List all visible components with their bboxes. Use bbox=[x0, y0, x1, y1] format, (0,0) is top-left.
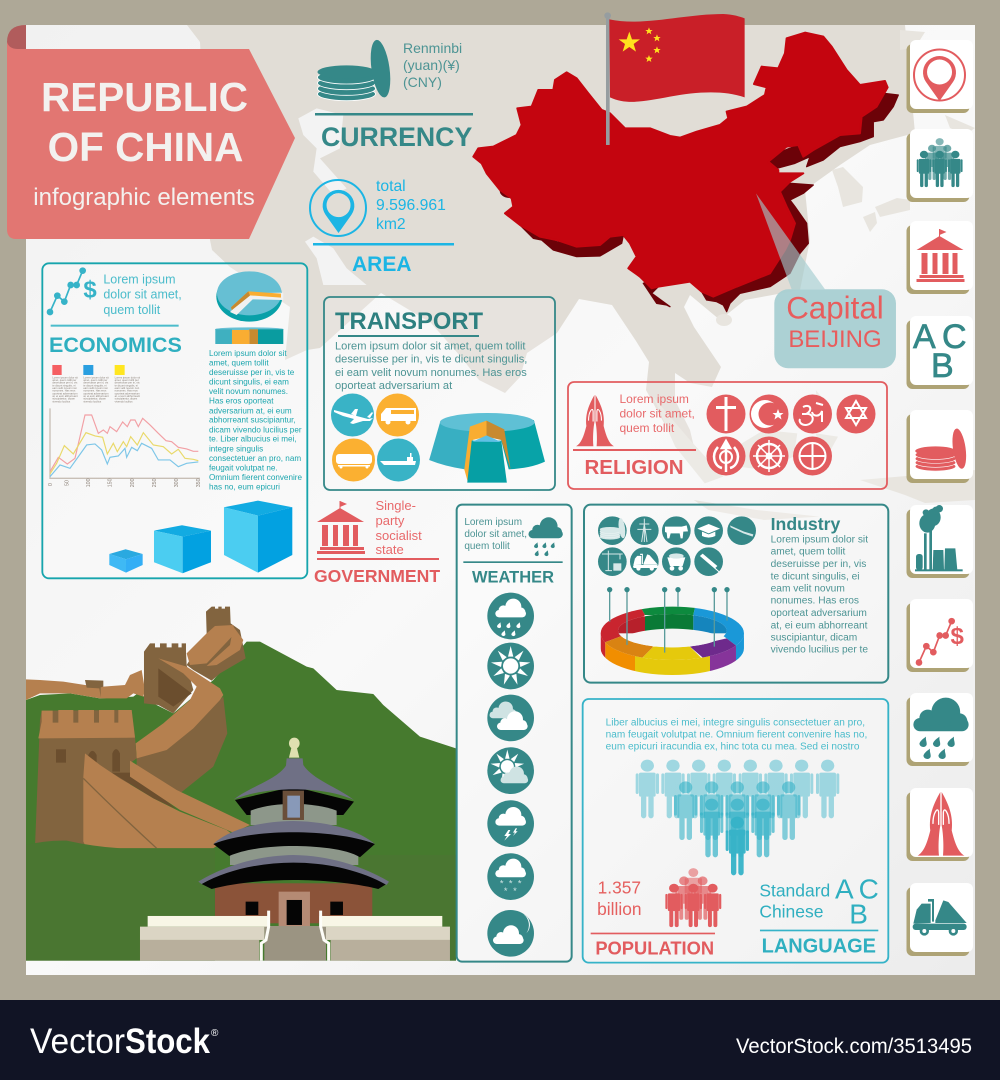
population text bbox=[606, 717, 867, 752]
industry text: nonumes. Has eros bbox=[771, 596, 859, 607]
pie chart icon bbox=[215, 271, 284, 344]
economics intro text: dolor sit amet, bbox=[103, 288, 182, 302]
watermark logo: ® bbox=[211, 1028, 219, 1039]
far wall bbox=[26, 670, 145, 700]
legend: deseruisse per in, vis bbox=[115, 381, 140, 385]
industry icons bbox=[598, 516, 756, 576]
legend: te dicunt singulis, ei bbox=[115, 383, 138, 387]
icon: sun and cloud bbox=[487, 747, 534, 794]
religion text: quem tollit bbox=[620, 421, 675, 435]
legend: eam velit novum non bbox=[115, 386, 140, 390]
icon: storm bbox=[487, 800, 534, 847]
icon: area pin bbox=[310, 180, 366, 236]
legend: oporteat adversarium bbox=[52, 391, 78, 395]
transport text bbox=[335, 340, 527, 392]
weather text bbox=[464, 517, 527, 552]
religion symbols bbox=[706, 394, 876, 476]
legend: Lorem ipsum dolor sit bbox=[52, 375, 78, 379]
industry text: te dicunt singulis, ei bbox=[771, 571, 860, 582]
industry text: eam velit novum bbox=[771, 584, 845, 595]
economics body text: integre singulis bbox=[209, 444, 263, 453]
area text bbox=[376, 178, 446, 233]
map land bbox=[473, 33, 888, 297]
language text bbox=[759, 880, 830, 921]
line chart: 50 bbox=[65, 480, 71, 486]
transport heading: TRANSPORT bbox=[335, 308, 484, 335]
line chart: 300 bbox=[174, 478, 180, 487]
card: factory bbox=[906, 505, 973, 578]
economics body text: dicunt singulis, ei eam bbox=[209, 378, 289, 387]
legend: nonumes. Has eros bbox=[52, 389, 76, 393]
area text: total bbox=[376, 178, 406, 195]
transport text: deseruisse per in, vis te dicunt singulis, bbox=[335, 354, 527, 366]
panel: government bbox=[314, 498, 440, 586]
panel: economics bbox=[42, 263, 307, 578]
religion text bbox=[620, 392, 695, 435]
ABC letters: B bbox=[849, 898, 868, 929]
legend: eam velit novum non bbox=[52, 386, 77, 390]
icon: praying hands bbox=[576, 395, 614, 446]
legend: at, ei eum abhorreant bbox=[115, 394, 140, 398]
icon: snow: * bbox=[509, 879, 513, 889]
weather text: Lorem ipsum bbox=[464, 517, 522, 528]
card: building bbox=[906, 221, 973, 294]
icon: plane bbox=[331, 394, 374, 436]
line chart: 0 bbox=[48, 483, 54, 486]
legend: eam velit novum non bbox=[83, 386, 108, 390]
industry text: amet, quem tollit bbox=[771, 547, 846, 558]
currency text bbox=[403, 40, 462, 90]
icon: rain bbox=[487, 593, 534, 639]
watermark url: VectorStock.com/3513495 bbox=[736, 1035, 972, 1058]
background world map bbox=[187, 25, 975, 520]
footer bar bbox=[0, 1000, 1000, 1080]
government text: party bbox=[376, 513, 405, 528]
icon: ship bbox=[377, 438, 420, 482]
currency text: (CNY) bbox=[403, 74, 442, 90]
line chart: 250 bbox=[152, 478, 158, 487]
economics body text: deseruisse per in, vis te bbox=[209, 368, 295, 377]
industry text: suscipiantur, dicam bbox=[771, 632, 857, 643]
legend: deseruisse per in, vis bbox=[52, 381, 78, 385]
icon: coins bbox=[318, 39, 393, 101]
map shadow bbox=[500, 47, 898, 312]
icon: government building bbox=[317, 501, 365, 554]
industry text: Lorem ipsum dolor sit bbox=[771, 534, 868, 545]
flag pole bbox=[604, 12, 611, 145]
icon: growth chart bbox=[47, 267, 97, 315]
panel: weather bbox=[457, 505, 572, 962]
card: language letters bbox=[906, 316, 973, 389]
legend: te dicunt singulis, ei bbox=[52, 383, 76, 387]
economics body text: has no, eum epicuri bbox=[209, 482, 280, 491]
capital text bbox=[786, 290, 884, 353]
religion text: dolor sit amet, bbox=[620, 406, 695, 420]
legend: vivendo lucilius bbox=[83, 399, 102, 403]
panel: industry bbox=[584, 505, 888, 683]
economics intro text bbox=[103, 272, 182, 317]
population text: eum epicuri iracundia ex, hinc tota cu mea. Sed ei nostro bbox=[606, 741, 860, 752]
map of China bbox=[473, 33, 898, 312]
icon: snow: * bbox=[513, 886, 517, 896]
population figure: 1.357 bbox=[598, 878, 641, 898]
icon: moon and cloud bbox=[487, 910, 534, 957]
icon: snow: * bbox=[504, 886, 508, 896]
economics body text: Omnium fierent convenire bbox=[209, 473, 302, 482]
economics body text: Has eros oporteat bbox=[209, 397, 274, 406]
legend bbox=[52, 365, 141, 403]
legend: oporteat adversarium bbox=[115, 391, 141, 395]
card: trend bbox=[906, 599, 973, 672]
economics heading: ECONOMICS bbox=[49, 332, 182, 357]
flag of China bbox=[604, 12, 745, 145]
legend: deseruisse per in, vis bbox=[83, 381, 109, 385]
card: hands bbox=[906, 788, 973, 861]
currency heading: CURRENCY bbox=[321, 122, 472, 152]
area heading: AREA bbox=[352, 253, 412, 276]
industry text: oporteat adversarium bbox=[771, 608, 867, 619]
panel: transport bbox=[324, 297, 555, 490]
flag cloth bbox=[609, 14, 745, 102]
economics body text: dicam vivendo lucilius per bbox=[209, 425, 302, 434]
ABC letters: C bbox=[859, 873, 879, 904]
card: language letters: C bbox=[942, 318, 967, 356]
economics body text: consectetuer an pro, nam bbox=[209, 454, 301, 463]
icon: growth chart: $ bbox=[83, 277, 97, 304]
economics body text: Lorem ipsum dolor sit bbox=[209, 349, 287, 358]
line chart: 150 bbox=[108, 478, 114, 487]
sidebar icon cards bbox=[906, 40, 973, 956]
legend: amet, quem tollit per bbox=[83, 378, 108, 382]
economics body text: velit novum nonumes. bbox=[209, 387, 288, 396]
ring chart bbox=[600, 606, 744, 675]
panel: currency bbox=[315, 39, 473, 152]
legend: oporteat adversarium bbox=[83, 391, 109, 395]
title text bbox=[33, 74, 255, 211]
population heading: POPULATION bbox=[595, 937, 714, 958]
transport text: ei eam velit novum nonumes. Has eros bbox=[335, 367, 527, 379]
legend: Lorem ipsum dolor sit bbox=[83, 375, 109, 379]
legend: suscipiantur, dicam bbox=[115, 397, 138, 401]
card: language letters: B bbox=[931, 347, 954, 385]
line chart bbox=[48, 408, 202, 487]
3D pie icon bbox=[429, 413, 545, 483]
industry heading: Industry bbox=[771, 514, 840, 534]
card: location bbox=[906, 40, 973, 113]
industry text: vivendo lucilius per te bbox=[771, 645, 868, 656]
title text: OF CHINA bbox=[48, 124, 243, 170]
weather heading: WEATHER bbox=[472, 568, 554, 586]
card: people bbox=[906, 129, 973, 202]
industry text bbox=[771, 534, 868, 656]
icon: cloudy bbox=[487, 695, 534, 741]
card: trend: $ bbox=[950, 623, 964, 650]
panel: population and language bbox=[583, 699, 888, 963]
currency text: Renminbi bbox=[403, 40, 462, 56]
foreground grass bbox=[26, 841, 215, 961]
front tower bbox=[35, 710, 137, 847]
chart pins bbox=[607, 587, 730, 653]
watermark logo: Stock bbox=[125, 1022, 210, 1061]
industry text: deseruisse per in, vis bbox=[771, 559, 866, 570]
government text: Single- bbox=[376, 498, 416, 513]
religion text: Lorem ipsum bbox=[620, 392, 689, 406]
legend: at, ei eum abhorreant bbox=[52, 394, 78, 398]
economics body text: te. Liber albucius ei mei, bbox=[209, 435, 297, 444]
title text: REPUBLIC bbox=[41, 74, 248, 120]
flag stars bbox=[619, 27, 661, 62]
ABC letters bbox=[835, 873, 879, 929]
government text: state bbox=[376, 542, 404, 557]
legend: vivendo lucilius bbox=[115, 399, 133, 403]
economics body text: abhorreant suscipiantur, bbox=[209, 416, 296, 425]
title text: infographic elements bbox=[33, 184, 255, 211]
legend: at, ei eum abhorreant bbox=[83, 394, 109, 398]
icon: rain cloud bbox=[528, 517, 563, 556]
line chart: 200 bbox=[130, 478, 136, 487]
legend: suscipiantur, dicam bbox=[52, 397, 76, 401]
title banner bbox=[7, 25, 295, 239]
green hill bbox=[26, 642, 456, 961]
line chart: 100 bbox=[86, 478, 92, 487]
population text: nam feugait volutpat ne. Omnium fierent convenire has no, bbox=[606, 729, 867, 740]
legend: nonumes. Has eros bbox=[83, 389, 107, 393]
temple of heaven bbox=[198, 738, 389, 927]
economics body text: amet, quem tollit bbox=[209, 359, 269, 368]
icon: snow bbox=[487, 853, 534, 900]
watermark logo bbox=[30, 1022, 219, 1061]
language text: Chinese bbox=[759, 901, 823, 921]
line chart: 350 bbox=[196, 478, 202, 487]
icon: red people bbox=[665, 868, 721, 927]
temple platform bbox=[140, 911, 450, 961]
icon: sun bbox=[487, 643, 534, 689]
capital text: Capital bbox=[786, 290, 884, 325]
icon: snow: * bbox=[500, 879, 504, 889]
weather text: dolor sit amet, bbox=[464, 529, 527, 540]
economics body text bbox=[209, 349, 302, 491]
icon: bus bbox=[376, 394, 419, 436]
watermark logo: Vector bbox=[30, 1022, 125, 1061]
legend: te dicunt singulis, ei bbox=[83, 383, 107, 387]
capital callout bbox=[756, 193, 896, 368]
government text: socialist bbox=[376, 528, 422, 543]
legend: suscipiantur, dicam bbox=[83, 397, 107, 401]
population figure bbox=[597, 878, 641, 919]
illustration: Great Wall and Temple of Heaven bbox=[26, 607, 456, 961]
government text bbox=[376, 498, 422, 557]
panel: religion bbox=[568, 382, 887, 489]
legend: Lorem ipsum dolor sit bbox=[115, 375, 140, 379]
economics body text: feugait volutpat ne. bbox=[209, 463, 278, 472]
area text: 9.596.961 bbox=[376, 197, 446, 214]
capital text: BEIJING bbox=[788, 326, 882, 353]
card: language letters: A bbox=[913, 318, 936, 356]
religion heading: RELIGION bbox=[584, 456, 684, 479]
panel: area bbox=[310, 178, 454, 276]
transport text: oporteat adversarium at bbox=[335, 380, 452, 392]
government heading: GOVERNMENT bbox=[314, 566, 440, 586]
card: rain bbox=[906, 693, 973, 766]
card: coins bbox=[906, 410, 973, 483]
population figure: billion bbox=[597, 899, 641, 919]
industry text: at, ei eum abhorreant bbox=[771, 620, 868, 631]
legend: amet, quem tollit per bbox=[115, 378, 139, 382]
area text: km2 bbox=[376, 216, 406, 233]
ABC letters: A bbox=[835, 873, 854, 904]
upper tower and wall bbox=[144, 607, 246, 713]
legend: vivendo lucilius bbox=[52, 399, 71, 403]
economics intro text: Lorem ipsum bbox=[103, 272, 175, 286]
people pictogram bbox=[636, 760, 839, 875]
legend: nonumes. Has eros bbox=[115, 389, 138, 393]
front wall bbox=[83, 753, 250, 848]
language text: Standard bbox=[759, 880, 830, 900]
icon: snow: * bbox=[518, 879, 522, 889]
language heading: LANGUAGE bbox=[762, 935, 876, 957]
legend: amet, quem tollit per bbox=[52, 378, 77, 382]
bar cubes bbox=[109, 501, 292, 573]
population text: Liber albucius ei mei, integre singulis consectetuer an pro, bbox=[606, 717, 865, 728]
serpentine wall bbox=[136, 658, 227, 793]
currency text: (yuan)(¥) bbox=[403, 57, 460, 73]
economics body text: adversarium at, ei eum bbox=[209, 406, 292, 415]
icon: train bbox=[332, 438, 375, 482]
economics intro text: quem tollit bbox=[103, 303, 161, 317]
card: mining truck bbox=[906, 883, 973, 956]
transport text: Lorem ipsum dolor sit amet, quem tollit bbox=[335, 340, 526, 352]
weather text: quem tollit bbox=[464, 541, 510, 552]
